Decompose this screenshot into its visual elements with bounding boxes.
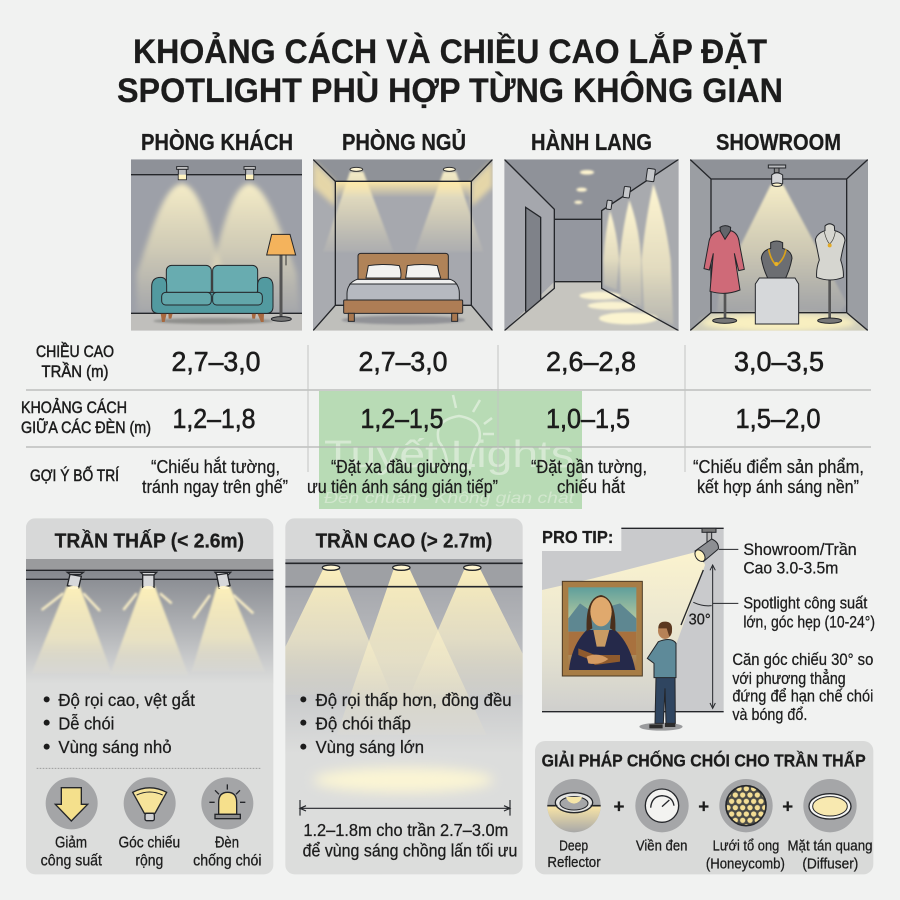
layout suggestions: kết hợp ánh sáng nền” [697, 477, 859, 497]
layout suggestions: chiếu hắt [557, 476, 625, 497]
icon: wide beam angle [124, 777, 176, 829]
ceiling height values: 2,6–2,8 [546, 346, 636, 377]
icon: ceiling spotlight [768, 165, 786, 186]
bullet list: Độ rọi thấp hơn, đồng đều [316, 690, 512, 710]
bullet list [44, 689, 195, 757]
layout suggestions [142, 456, 864, 497]
panel: low ceiling [26, 518, 273, 874]
angle label: 30° [689, 611, 711, 628]
solution captions: Lưới tổ ong [713, 838, 779, 855]
panel: bedroom illustration [313, 159, 493, 331]
icon captions: rộng [135, 853, 163, 870]
layout suggestions: ưu tiên ánh sáng gián tiếp” [307, 477, 498, 497]
icon: ceiling lights [574, 170, 594, 204]
bullet list: Vùng sáng lớn [316, 737, 424, 757]
arrow: 30 degree arc [693, 602, 712, 606]
watermark: Đèn chuẩn - Không gian chất [324, 489, 575, 507]
row label: ceiling height: TRẦN (m) [42, 362, 108, 381]
icon: track spotlights [177, 167, 255, 180]
column headings [141, 127, 841, 155]
callout: showroom ceiling: Showroom/Trần [743, 540, 857, 559]
layout suggestions: “Đặt xa đầu giường, [331, 457, 472, 477]
spacing values: 1,2–1,5 [360, 403, 444, 434]
bullet list: Dễ chói [58, 712, 114, 733]
dimension note: để vùng sáng chồng lấn tối ưu [303, 841, 517, 861]
panel: pro tip [542, 527, 875, 731]
icon captions [41, 835, 261, 870]
solution captions: Deep [559, 838, 588, 855]
panel: hallway illustration [504, 159, 679, 331]
ceiling height values: 2,7–3,0 [358, 346, 448, 377]
solution captions: (Honeycomb) [706, 855, 785, 872]
title: SPOTLIGHT PHÙ HỢP TỪNG KHÔNG GIAN [117, 71, 783, 110]
painting [562, 581, 642, 676]
icon: deep reflector [547, 779, 601, 833]
icon: necklace bust [761, 241, 792, 281]
heading: TRẦN CAO (> 2.7m) [316, 529, 492, 552]
column headings: SHOWROOM [716, 129, 841, 155]
plus sign: + [614, 795, 625, 816]
icon: bed [342, 253, 465, 324]
icon: white bust mannequin [815, 224, 845, 323]
layout suggestions: “Chiếu hắt tường, [151, 456, 280, 477]
callout: showroom ceiling [743, 540, 857, 577]
icon: anti glare beacon [201, 777, 253, 829]
panel: high ceiling [285, 518, 523, 874]
icon: reduce power [46, 777, 98, 829]
callout: spotlight power: lớn, góc hẹp (10-24°) [743, 614, 875, 632]
column headings: PHÒNG NGỦ [342, 127, 466, 155]
icon: wall track spotlights [606, 168, 656, 210]
icon: honeycomb grid [719, 779, 773, 832]
watermark [319, 391, 582, 509]
spacing values: 1,0–1,5 [546, 403, 630, 434]
row label: ceiling height [36, 342, 114, 381]
panel: living room illustration [131, 159, 302, 331]
solution captions: Viền đen [636, 838, 687, 855]
layout suggestions: tránh ngay trên ghế” [142, 477, 288, 497]
heading: GIẢI PHÁP CHỐNG CHÓI CHO TRẦN THẤP [542, 751, 866, 771]
note: aiming angle [732, 650, 873, 724]
dimension note: 1.2–1.8m cho trần 2.7–3.0m [303, 820, 508, 840]
solution captions: Mặt tán quang [787, 838, 872, 855]
icon: sofa [152, 265, 273, 324]
icon captions: Góc chiếu [118, 835, 180, 852]
bullet list [300, 690, 512, 757]
dimension note [303, 820, 517, 861]
note: aiming angle: với phương thẳng [732, 669, 846, 688]
icon captions: Giảm [55, 835, 87, 852]
solution captions: Reflector [547, 854, 601, 871]
icon: floor lamp [267, 234, 296, 321]
column headings: HÀNH LANG [531, 128, 652, 155]
heading: TRẦN THẤP (< 2.6m) [55, 529, 244, 552]
layout suggestions: “Chiếu điểm sản phẩm, [693, 457, 864, 477]
solution captions: (Diffuser) [802, 855, 858, 872]
icon: recessed lights [322, 565, 481, 570]
icon captions: chống chói [193, 853, 261, 870]
column headings: PHÒNG KHÁCH [141, 128, 293, 155]
icon: pedestal [755, 278, 799, 324]
icon: viewer [639, 622, 683, 731]
icon: angled spotlight [693, 528, 718, 563]
icon captions: Đèn [215, 835, 239, 852]
ceiling height values: 2,7–3,0 [172, 346, 260, 377]
spacing values [172, 403, 820, 434]
bullet list: Độ chói thấp [316, 713, 411, 733]
ceiling height values [172, 346, 824, 377]
plus sign: + [698, 795, 709, 816]
panel: anti-glare solutions [535, 741, 873, 874]
spacing values: 1,2–1,8 [172, 403, 256, 434]
note: aiming angle: đứng để hạn chế chói [732, 687, 873, 706]
icon: black bezel [635, 779, 689, 832]
data table [21, 342, 871, 497]
icon: glare spotlights [67, 572, 231, 589]
arrow: spacing dimension [300, 800, 510, 816]
note: aiming angle: Căn góc chiếu 30° so [732, 650, 873, 669]
note: aiming angle: và bóng đổ. [732, 705, 807, 724]
icon: diffuser [803, 779, 857, 832]
title: KHOẢNG CÁCH VÀ CHIỀU CAO LẮP ĐẶT [133, 33, 767, 71]
row label: layout suggestion: GỢI Ý BỐ TRÍ [30, 465, 119, 485]
bullet list: Vùng sáng nhỏ [58, 737, 172, 757]
callout: spotlight power: Spotlight công suất [743, 594, 868, 612]
title [117, 33, 783, 110]
callout: spotlight power [743, 594, 875, 632]
callout: showroom ceiling: Cao 3.0-3.5m [743, 558, 838, 577]
row label: spacing [21, 398, 151, 437]
ceiling height values: 3,0–3,5 [734, 346, 824, 377]
watermark: Tuyết Lights [324, 434, 574, 476]
panel: showroom illustration [690, 159, 868, 331]
layout suggestions: “Đặt gần tường, [531, 457, 647, 477]
icon: dress mannequin [704, 226, 744, 323]
solution captions [547, 838, 872, 872]
plus sign: + [782, 795, 793, 816]
arrow: vertical height [710, 565, 715, 708]
spacing values: 1,5–2,0 [736, 403, 820, 434]
icon captions: công suất [41, 853, 103, 870]
row label: spacing: GIỮA CÁC ĐÈN (m) [21, 418, 151, 437]
bullet list: Độ rọi cao, vệt gắt [58, 689, 195, 710]
row label: ceiling height: CHIỀU CAO [36, 342, 114, 361]
row label: spacing: KHOẢNG CÁCH [21, 398, 127, 417]
heading: PRO TIP: [542, 527, 613, 547]
